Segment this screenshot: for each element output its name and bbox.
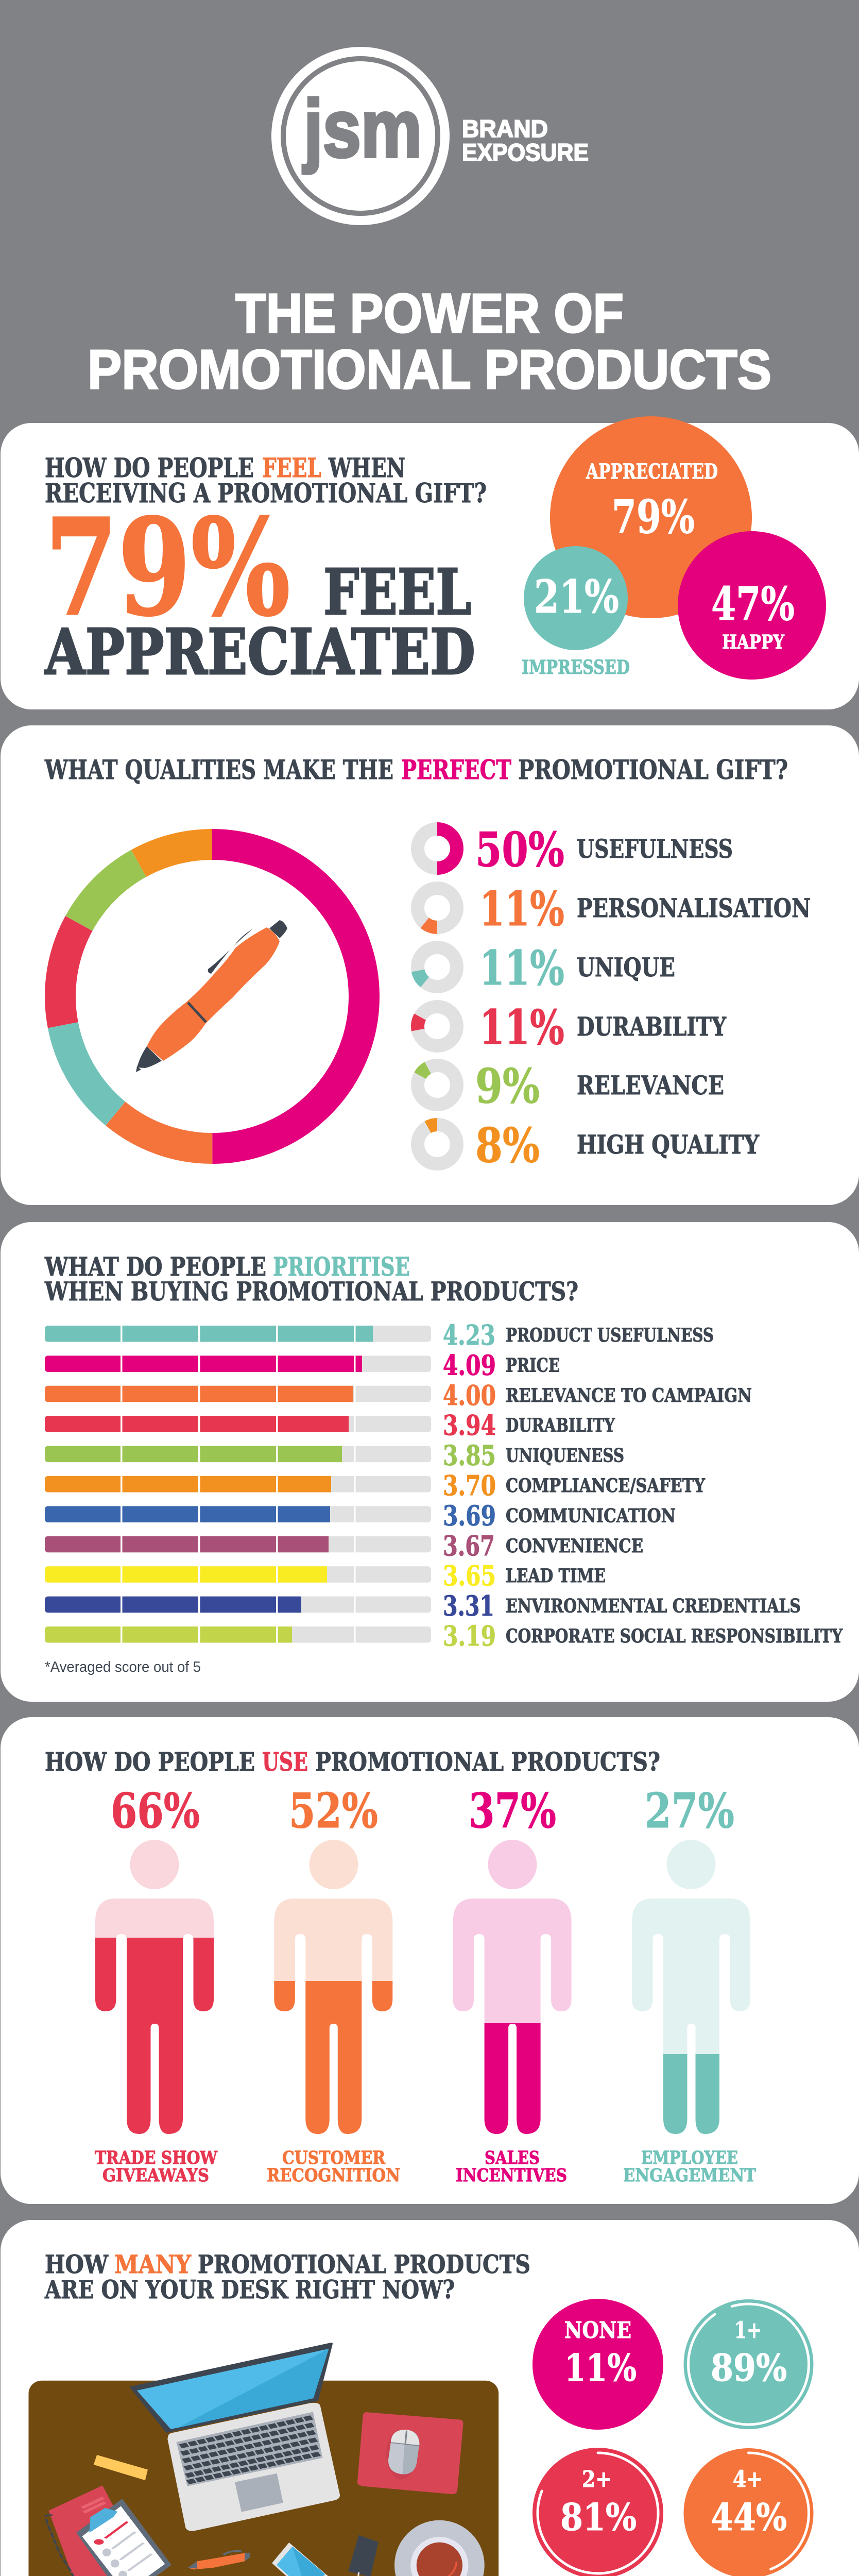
panel: perfect promotional gift (1, 725, 859, 1205)
ruler (94, 2455, 148, 2480)
bar labels: DURABILITY (506, 1415, 615, 1436)
row: usefulness 50%: USEFULNESS (577, 834, 733, 864)
figure: employee engagement 27%: EMPLOYEE (641, 2147, 738, 2168)
heading: perfect: WHAT QUALITIES MAKE THE (44, 755, 393, 786)
bar labels: COMMUNICATION (506, 1505, 676, 1527)
logo: jsm brand exposure: BRAND (462, 115, 548, 142)
figure: customer recognition 52%: CUSTOMER (282, 2147, 386, 2168)
logo: jsm brand exposure: EXPOSURE (462, 139, 589, 166)
figure: employee engagement 27%: ENGAGEMENT (623, 2165, 756, 2186)
clipboard (76, 2499, 171, 2576)
panel: products on desk (1, 2220, 859, 2576)
illustration: desk with laptop and items (28, 2344, 499, 2576)
stat: 1+ 89%: 89% (711, 2346, 787, 2389)
heading: prioritise: WHAT DO PEOPLE (44, 1251, 266, 1282)
stat: 4+ 44% (684, 2448, 814, 2576)
heading: feel: WHEN (328, 453, 405, 484)
headline: 79% feel appreciated: FEEL (323, 555, 471, 629)
heading: many: HOW (45, 2249, 109, 2279)
headline: 79% feel appreciated: 79% (45, 489, 290, 646)
section: desk products (1, 2220, 859, 2576)
heading: perfect: PROMOTIONAL GIFT? (518, 755, 788, 786)
bubble: appreciated 79%: APPRECIATED (586, 460, 718, 484)
heading: feel: HOW DO PEOPLE (45, 453, 254, 484)
bar labels: CONVENIENCE (506, 1535, 643, 1557)
coffee cup (394, 2520, 485, 2576)
bar values: 3.31 (443, 1590, 494, 1622)
title: THE POWER OF (235, 282, 624, 344)
stat: 4+ 44%: 4+ (733, 2466, 763, 2493)
bar values: 4.23 (443, 1319, 495, 1351)
section: usage (1, 1717, 859, 2204)
figure: employee engagement 27%: 27% (645, 1783, 734, 1839)
heading: prioritise (44, 1251, 578, 1307)
row: unique 11%: UNIQUE (577, 952, 675, 982)
row: unique 11% (418, 940, 675, 996)
heading: use (45, 1747, 660, 1777)
bar values: 4.00 (443, 1380, 496, 1412)
bar labels: UNIQUENESS (506, 1445, 624, 1467)
bubble: impressed 21% (522, 546, 630, 679)
bar labels: LEAD TIME (506, 1565, 606, 1587)
bar labels: ENVIRONMENTAL CREDENTIALS (506, 1596, 801, 1617)
heading: use: HOW DO PEOPLE (45, 1747, 255, 1777)
row: high quality 8% (418, 1117, 760, 1173)
bar values (443, 1319, 496, 1652)
bubble: happy 47%: 47% (711, 577, 795, 631)
row: high quality 8%: 8% (475, 1117, 540, 1173)
heading: feel: FEEL (262, 453, 321, 484)
bar values: 3.94 (443, 1410, 496, 1442)
heading: perfect (44, 755, 788, 786)
figure: trade show giveaways 66%: GIVEAWAYS (102, 2165, 209, 2186)
figure: sales incentives 37%: INCENTIVES (456, 2165, 567, 2186)
stat: 1+ 89%: 1+ (734, 2317, 762, 2344)
row: relevance 9% (418, 1058, 724, 1114)
stat: 2+ 81% (532, 2448, 663, 2576)
small pen (188, 2551, 250, 2569)
title (88, 282, 771, 400)
figure: trade show giveaways 66% (95, 1783, 218, 2186)
bubble: appreciated 79% (550, 416, 752, 618)
footnote: *Averaged score out of 5 (45, 1659, 201, 1675)
laptop (131, 2344, 340, 2531)
bubble: impressed 21%: 21% (534, 570, 619, 623)
mouse and pad (357, 2412, 463, 2494)
row: unique 11%: 11% (479, 940, 564, 996)
heading: use: PROMOTIONAL PRODUCTS? (315, 1747, 660, 1777)
figure: customer recognition 52%: RECOGNITION (267, 2165, 400, 2186)
figure: sales incentives 37%: 37% (469, 1783, 556, 1839)
bar labels: RELEVANCE TO CAMPAIGN (506, 1385, 752, 1406)
row: personalisation 11%: 11% (479, 881, 564, 937)
row: durability 11%: DURABILITY (577, 1011, 727, 1042)
bubble: happy 47% (678, 531, 826, 680)
panel: how people feel (1, 416, 859, 709)
section: perfect gift (1, 725, 859, 1205)
figure: trade show giveaways 66%: 66% (111, 1783, 200, 1839)
panel: priorities (1, 1222, 859, 1702)
row: personalisation 11% (418, 881, 811, 937)
bar values: 3.67 (443, 1530, 495, 1562)
heading: feel: RECEIVING A PROMOTIONAL GIFT? (45, 478, 487, 509)
ring chart (60, 844, 364, 1148)
bar labels: PRODUCT USEFULNESS (506, 1325, 714, 1346)
row: usefulness 50%: 50% (475, 822, 564, 877)
bar values: 3.69 (443, 1500, 496, 1532)
stat: none 11%: NONE (564, 2317, 631, 2344)
headline: 79% feel appreciated: APPRECIATED (44, 615, 475, 689)
heading: many: PROMOTIONAL PRODUCTS (198, 2249, 530, 2279)
heading: feel (45, 453, 487, 509)
logo: jsm brand exposure (276, 52, 589, 221)
bar labels: COMPLIANCE/SAFETY (506, 1475, 706, 1497)
bar values: 3.70 (443, 1470, 496, 1502)
bar values: 3.65 (443, 1560, 496, 1592)
icon: pen (136, 920, 287, 1072)
logo: jsm brand exposure: jsm (302, 83, 422, 174)
bubble: appreciated 79%: 79% (612, 489, 695, 544)
row: usefulness 50% (418, 822, 733, 877)
stat: 2+ 81%: 2+ (582, 2466, 612, 2493)
figure: customer recognition 52% (267, 1783, 400, 2186)
row: durability 11%: 11% (479, 999, 564, 1055)
stat: none 11% (532, 2299, 663, 2430)
stat: none 11%: 11% (564, 2346, 637, 2389)
stat: 4+ 44%: 44% (711, 2495, 787, 2539)
heading: perfect: PERFECT (401, 755, 511, 786)
bubble: happy 47%: HAPPY (722, 631, 784, 653)
bar values: 4.09 (443, 1349, 496, 1381)
section: priorities (1, 1222, 859, 1702)
bar labels: PRICE (506, 1354, 560, 1376)
figure: sales incentives 37% (453, 1783, 572, 2186)
title: PROMOTIONAL PRODUCTS (88, 338, 771, 400)
heading: prioritise: PRIORITISE (273, 1251, 410, 1282)
heading: use: USE (262, 1747, 308, 1777)
headline: 79% feel appreciated (44, 489, 475, 689)
section: header and feelings panel (1, 47, 859, 709)
bar values: 3.85 (443, 1440, 496, 1472)
figure: customer recognition 52%: 52% (289, 1783, 378, 1839)
panel: how people use (1, 1717, 859, 2204)
notebook (46, 2485, 113, 2576)
figure: employee engagement 27% (623, 1783, 756, 2186)
row: personalisation 11%: PERSONALISATION (577, 893, 811, 923)
row: relevance 9%: 9% (475, 1058, 540, 1114)
phone and charger (272, 2535, 379, 2576)
heading: many: ARE ON YOUR DESK RIGHT NOW? (44, 2275, 455, 2304)
figure: trade show giveaways 66%: TRADE SHOW (95, 2147, 218, 2168)
stat: 2+ 81%: 81% (560, 2495, 637, 2539)
row: relevance 9%: RELEVANCE (577, 1070, 724, 1100)
figure: sales incentives 37%: SALES (485, 2147, 540, 2168)
heading: many (44, 2249, 530, 2304)
bar labels (506, 1325, 843, 1647)
row: high quality 8%: HIGH QUALITY (577, 1129, 760, 1160)
row: durability 11% (418, 999, 727, 1055)
bar chart: scores (45, 1324, 431, 1645)
heading: prioritise: WHEN BUYING PROMOTIONAL PRODUCTS? (44, 1276, 578, 1307)
bubble: impressed 21%: IMPRESSED (522, 656, 630, 679)
stat: 1+ 89% (674, 2290, 823, 2439)
heading: many: MANY (114, 2249, 192, 2279)
bar values: 3.19 (443, 1620, 496, 1652)
